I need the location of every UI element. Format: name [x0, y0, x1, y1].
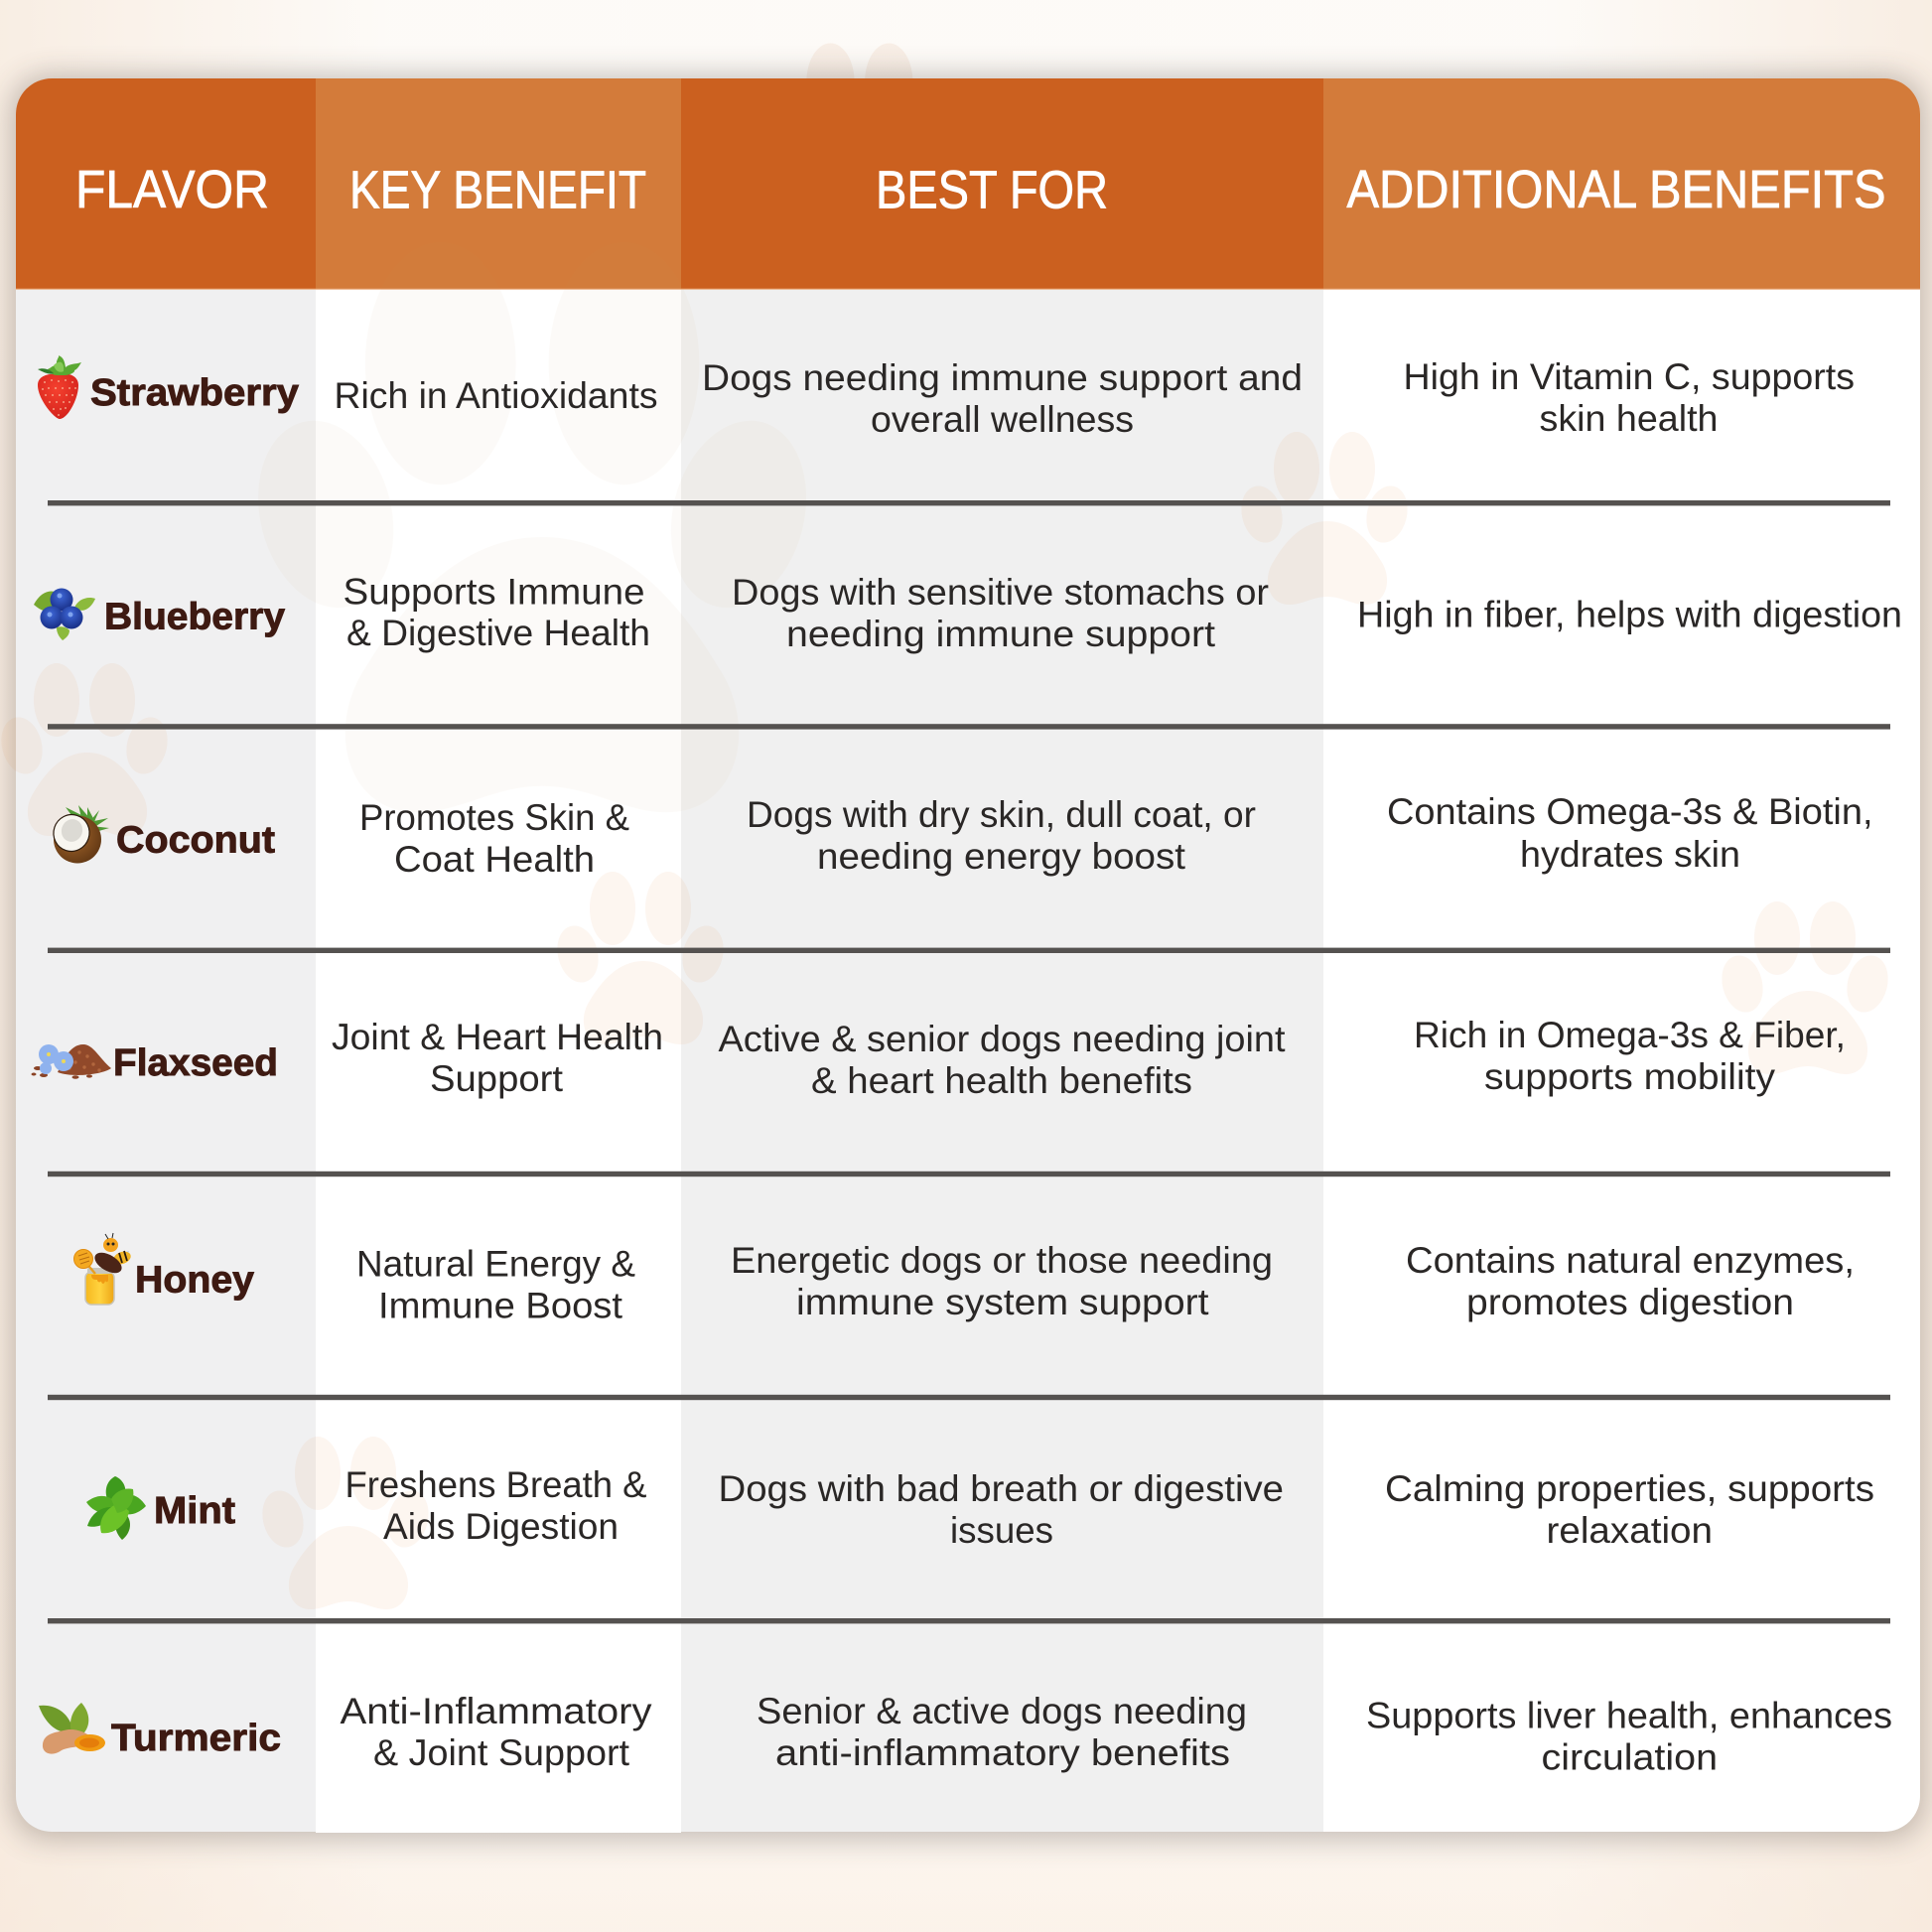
- row: strawberry: [38, 355, 1855, 440]
- flavor name: Mint: [154, 1490, 235, 1532]
- additional benefits: [1366, 1696, 1892, 1777]
- additional benefits: [1406, 1240, 1855, 1322]
- icon: honey jar with bee: [73, 1233, 133, 1305]
- flavor name: Turmeric: [111, 1718, 281, 1759]
- best for: needing energy boost: [817, 836, 1186, 877]
- key benefit: Immune Boost: [378, 1285, 623, 1326]
- heading: best for: BEST FOR: [876, 161, 1108, 220]
- row: turmeric: [39, 1691, 1892, 1777]
- key benefit: [345, 1464, 647, 1547]
- best for: Senior & active dogs needing: [757, 1691, 1247, 1731]
- additional benefits: [1404, 356, 1855, 439]
- best for: [719, 1019, 1286, 1101]
- additional benefits: Rich in Omega-3s & Fiber,: [1414, 1015, 1846, 1055]
- flavor name: Coconut: [116, 820, 275, 862]
- icon: mint leaves: [86, 1476, 146, 1540]
- best for: overall wellness: [871, 399, 1134, 440]
- header row: [75, 160, 1886, 220]
- key benefit: [344, 572, 650, 653]
- flavor name: Flaxseed: [113, 1042, 278, 1084]
- additional benefits: Supports liver health, enhances: [1366, 1696, 1892, 1735]
- key benefit: Natural Energy &: [356, 1243, 635, 1285]
- key benefit: [332, 1017, 663, 1099]
- additional benefits: [1387, 791, 1872, 875]
- key benefit: [340, 1691, 652, 1773]
- best for: [719, 1468, 1284, 1551]
- additional benefits: High in fiber, helps with digestion: [1357, 594, 1902, 635]
- key benefit: Anti-Inflammatory: [340, 1691, 652, 1731]
- key benefit: & Digestive Health: [346, 613, 650, 653]
- icon: flaxseed: [32, 1044, 111, 1079]
- best for: Dogs with bad breath or digestive: [719, 1468, 1284, 1509]
- best for: Active & senior dogs needing joint: [719, 1019, 1286, 1059]
- additional benefits: [1385, 1468, 1874, 1551]
- key benefit: [356, 1243, 635, 1326]
- best for: Dogs with sensitive stomachs or: [732, 572, 1269, 613]
- key benefit: Supports Immune: [344, 572, 645, 612]
- best for: & heart health benefits: [811, 1060, 1192, 1101]
- additional benefits: High in Vitamin C, supports: [1404, 356, 1855, 397]
- icon: turmeric root: [39, 1703, 105, 1754]
- additional benefits: Contains Omega-3s & Biotin,: [1387, 791, 1872, 832]
- row: coconut: [49, 791, 1872, 880]
- best for: anti-inflammatory benefits: [775, 1732, 1230, 1773]
- flavor name: Blueberry: [104, 596, 285, 637]
- row: flaxseed: [32, 1015, 1846, 1101]
- best for: [731, 1240, 1273, 1322]
- best for: issues: [950, 1510, 1053, 1551]
- key benefit: Promotes Skin &: [359, 797, 629, 838]
- icon: coconut: [49, 805, 109, 864]
- row: honey: [73, 1233, 1855, 1326]
- heading: key benefit: KEY BENEFIT: [349, 161, 646, 220]
- best for: [732, 572, 1269, 654]
- row: blueberry: [34, 572, 1902, 654]
- key benefit: Support: [430, 1058, 564, 1099]
- additional benefits: supports mobility: [1484, 1056, 1776, 1097]
- key benefit: Coat Health: [394, 839, 595, 880]
- key benefit: Joint & Heart Health: [332, 1017, 663, 1057]
- best for: Energetic dogs or those needing: [731, 1240, 1273, 1281]
- best for: Dogs with dry skin, dull coat, or: [747, 794, 1256, 835]
- best for: needing immune support: [786, 614, 1216, 654]
- icon: blueberry: [34, 588, 95, 640]
- key benefit: & Joint Support: [373, 1732, 630, 1773]
- best for: [757, 1691, 1247, 1773]
- additional benefits: hydrates skin: [1520, 834, 1740, 875]
- heading: flavor: FLAVOR: [75, 160, 269, 219]
- key benefit: Rich in Antioxidants: [334, 375, 657, 416]
- key benefit: [359, 797, 629, 880]
- icon: strawberry: [38, 355, 81, 419]
- paw watermarks: [0, 432, 1893, 1609]
- additional benefits: circulation: [1541, 1737, 1718, 1777]
- additional benefits: Calming properties, supports: [1385, 1468, 1874, 1509]
- best for: Dogs needing immune support and: [702, 357, 1303, 398]
- additional benefits: promotes digestion: [1466, 1282, 1794, 1322]
- additional benefits: relaxation: [1547, 1510, 1713, 1551]
- additional benefits: [1414, 1015, 1846, 1097]
- flavor name: Strawberry: [90, 372, 299, 414]
- background paw behind table top: [766, 44, 953, 224]
- heading: additional benefits: ADDITIONAL BENEFITS: [1346, 160, 1886, 219]
- additional benefits: skin health: [1539, 398, 1718, 439]
- flavor name: Honey: [135, 1259, 254, 1301]
- best for: [747, 794, 1256, 877]
- additional benefits: Contains natural enzymes,: [1406, 1240, 1855, 1281]
- best for: [702, 357, 1303, 440]
- best for: immune system support: [796, 1282, 1209, 1322]
- key benefit: Aids Digestion: [383, 1506, 619, 1547]
- row: mint: [86, 1464, 1874, 1551]
- large background paw: [239, 242, 825, 812]
- key benefit: Freshens Breath &: [345, 1464, 647, 1505]
